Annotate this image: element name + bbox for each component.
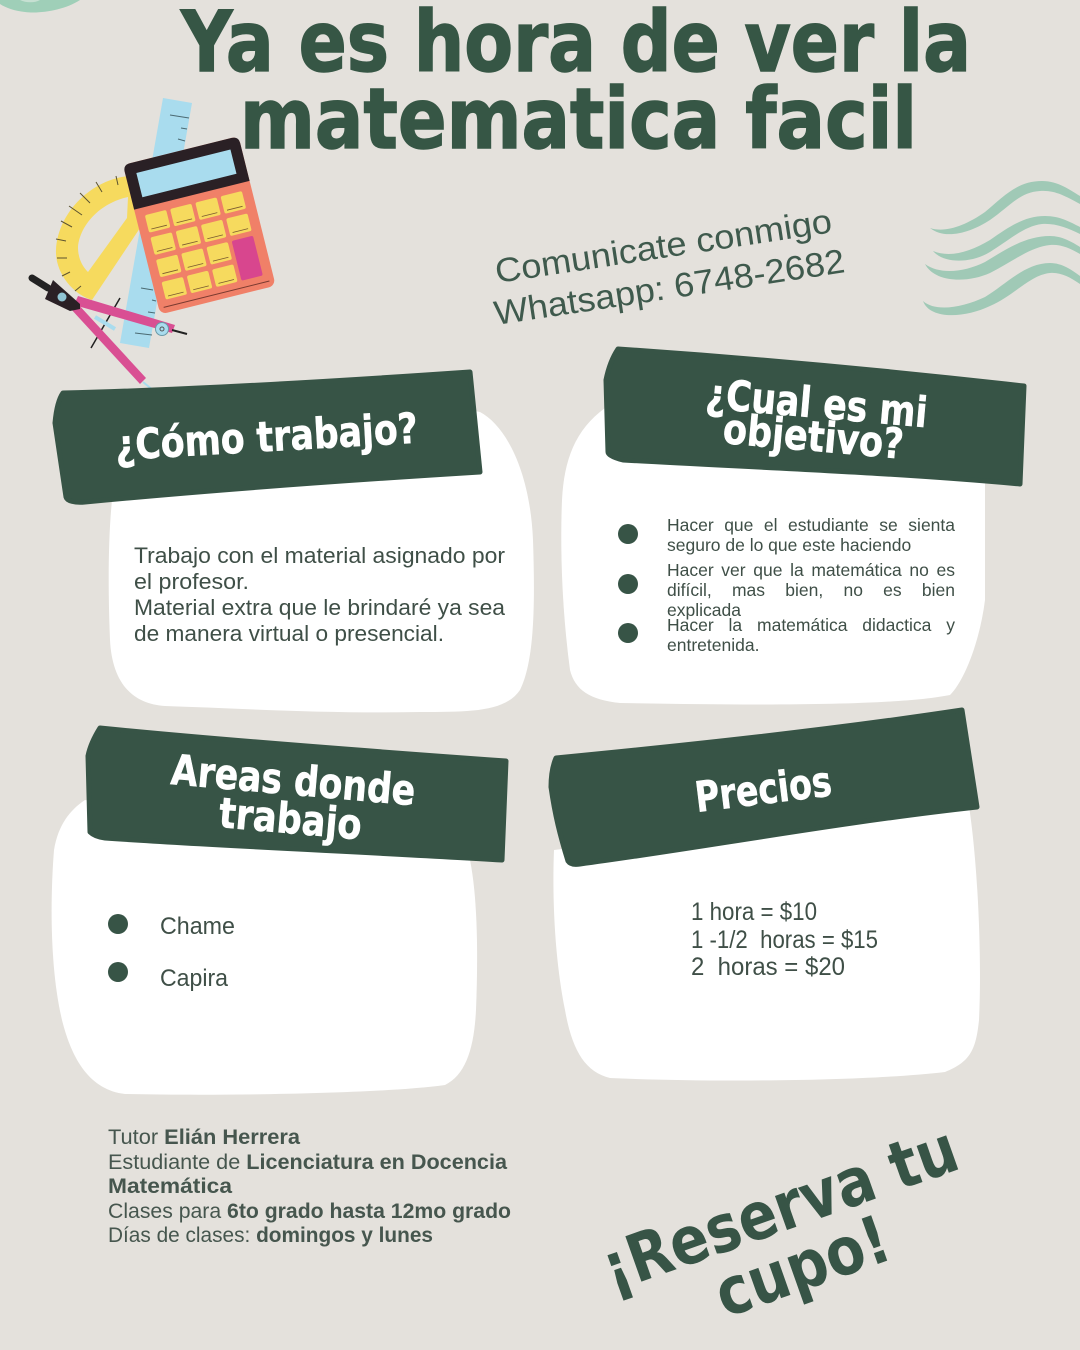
bullets	[618, 524, 638, 643]
bullet list: difícil, mas bien, no es bien	[667, 580, 955, 600]
bullet list: Hacer ver que la matemática no es	[667, 560, 955, 580]
icon: math tools illustration	[32, 98, 276, 391]
heading: ¿Cual es mi	[704, 369, 930, 437]
heading: Areas donde	[169, 745, 417, 815]
heading: objetivo?	[721, 404, 906, 469]
heading: Precios	[692, 757, 834, 822]
heading	[169, 745, 417, 849]
title: matematica facil	[240, 70, 917, 168]
text block: Material extra que le brindaré ya sea	[134, 595, 506, 620]
banner	[88, 728, 506, 860]
tutor info: Estudiante de Licenciatura en Docencia	[108, 1150, 508, 1174]
bullets	[108, 914, 128, 982]
list: Capira	[160, 965, 229, 992]
text block: Trabajo con el material asignado por	[134, 543, 505, 568]
text block: de manera virtual o presencial.	[134, 621, 444, 646]
price list: 1 -1/2 horas = $15	[691, 926, 878, 954]
list: Chame	[160, 913, 235, 940]
bullet list: entretenida.	[667, 635, 759, 655]
banner	[551, 710, 977, 864]
bullet list: explicada	[667, 600, 741, 620]
tutor info: Días de clases: domingos y lunes	[108, 1223, 433, 1247]
panel: areas	[52, 728, 506, 1095]
panel: objetivo	[561, 349, 1024, 704]
icon: calculator	[123, 136, 276, 314]
panel: como trabajo	[55, 372, 534, 712]
card background	[553, 800, 980, 1080]
bullet list: Hacer que el estudiante se sienta	[667, 515, 955, 535]
card background	[52, 800, 477, 1095]
bullet list: Hacer la matemática didactica y	[667, 615, 955, 635]
icon: protractor	[56, 176, 150, 300]
card background	[561, 408, 985, 704]
bullet list	[667, 515, 955, 655]
icon: mint waves	[923, 181, 1080, 315]
tutor info: Tutor Elián Herrera	[108, 1125, 301, 1149]
contact text: Comunicate conmigo	[493, 202, 834, 291]
heading: ¿Cómo trabajo?	[114, 404, 419, 470]
heading	[704, 369, 930, 469]
banner	[55, 372, 480, 502]
icon: ruler	[120, 98, 192, 348]
corner arc decoration	[0, 0, 80, 12]
list	[160, 913, 235, 992]
price list: 1 hora = $10	[691, 898, 817, 926]
tutor info: Matemática	[108, 1174, 233, 1198]
text block: el profesor.	[134, 569, 249, 594]
tutor info	[108, 1125, 511, 1247]
card background	[109, 410, 534, 712]
bullet list: seguro de lo que este haciendo	[667, 535, 911, 555]
price list	[691, 898, 878, 981]
call to action: ¡Reserva tu	[592, 1110, 968, 1307]
contact text: Whatsapp: 6748-2682	[492, 242, 847, 333]
banner	[606, 349, 1024, 484]
price list: 2 horas = $20	[691, 953, 845, 981]
title	[180, 0, 971, 168]
call to action: cupo!	[705, 1200, 900, 1333]
contact text	[492, 202, 847, 333]
tutor info: Clases para 6to grado hasta 12mo grado	[108, 1199, 511, 1223]
text block	[134, 543, 506, 646]
panel: precios	[551, 710, 980, 1080]
heading: trabajo	[217, 788, 364, 849]
icon: compass	[32, 278, 187, 391]
